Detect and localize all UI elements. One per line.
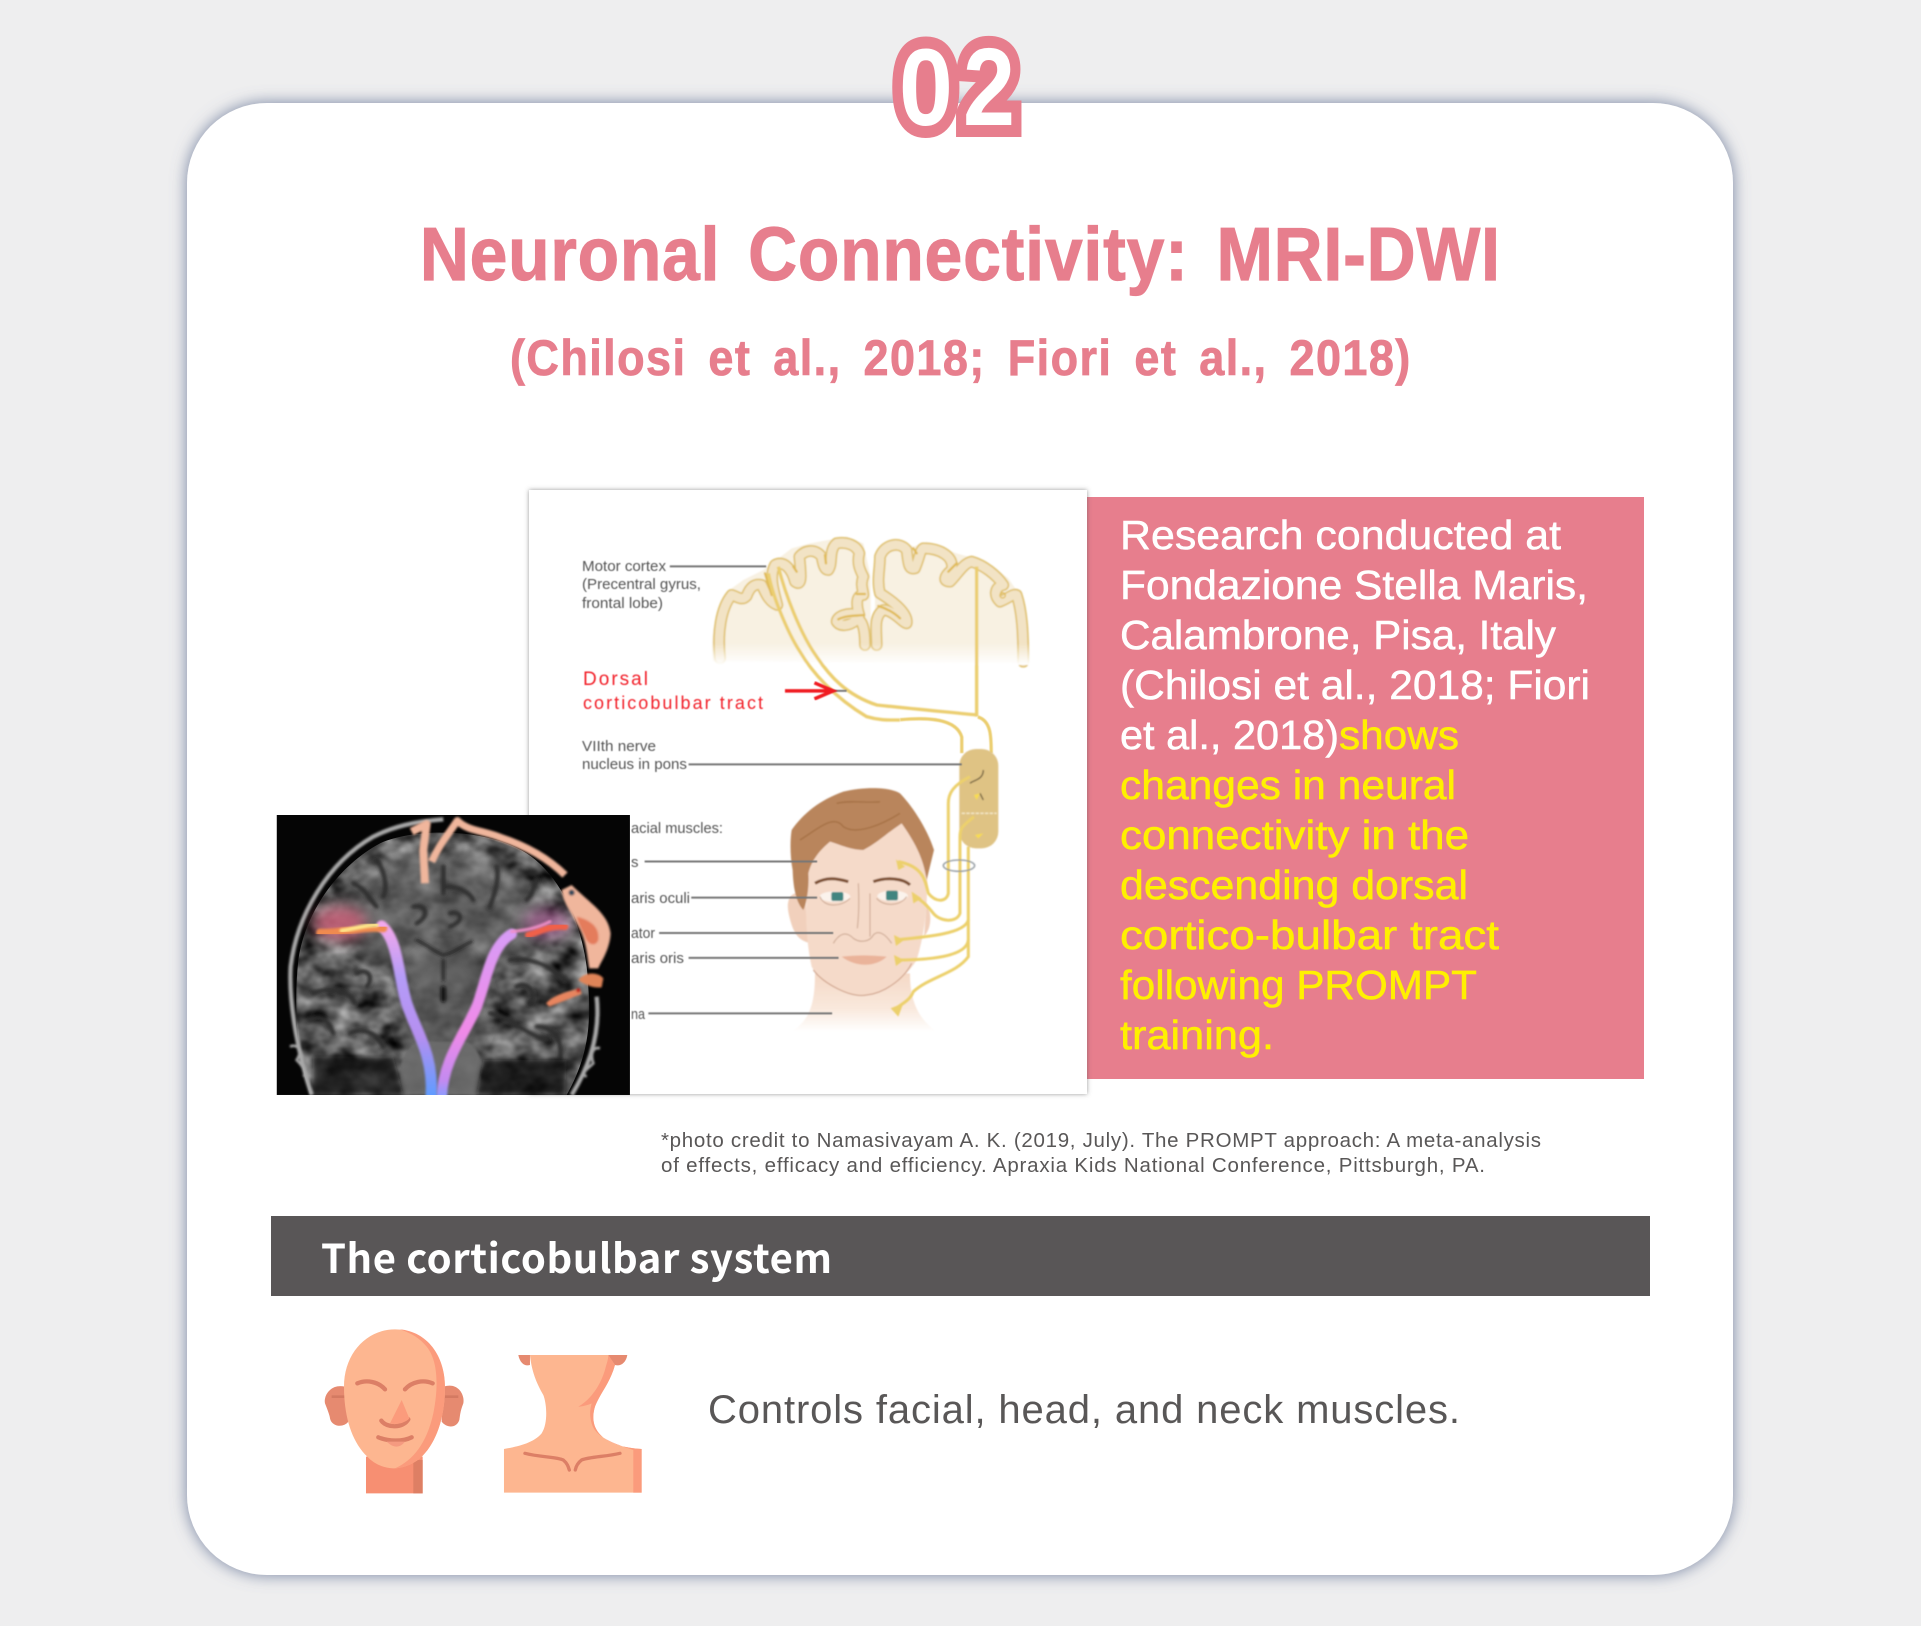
facial muscle labels: s (631, 854, 638, 871)
diagram labels: nucleus in pons (582, 756, 687, 773)
scalp vessels (412, 821, 611, 1007)
skull outline (290, 819, 600, 1095)
icon: head (325, 1329, 464, 1493)
research text: training. (1120, 1012, 1274, 1058)
facial muscle labels: aris oris (631, 950, 684, 967)
icon: neck (504, 1355, 642, 1493)
research text: changes in neural (1120, 762, 1456, 808)
left and right tract traces (320, 922, 565, 1097)
section number 02 (899, 25, 1015, 149)
brain tissue (296, 833, 589, 1095)
research text: descending dorsal (1120, 862, 1468, 908)
pons and lower tracts (891, 749, 998, 1017)
research text: (Chilosi et al., 2018; Fiori (1120, 662, 1590, 708)
connecting tracts to pons (900, 717, 991, 753)
section number 02: 2 (963, 26, 1015, 149)
upper tracts (768, 567, 977, 720)
research text: connectivity in the (1120, 812, 1469, 858)
research text: Fondazione Stella Maris, (1120, 562, 1588, 608)
research text: et al., 2018) (1120, 712, 1339, 758)
photo credit caption: *photo credit to Namasivayam A. K. (2019, July). The PROMPT approach: A meta-analysis (661, 1129, 1541, 1152)
label leader lines (645, 566, 962, 1013)
photo credit caption: of effects, efficacy and efficiency. Apraxia Kids National Conference, Pittsburgh, PA. (661, 1154, 1485, 1177)
description text: Controls facial, head, and neck muscles. (708, 1388, 1460, 1432)
brain (707, 537, 1037, 720)
diagram labels: frontal lobe) (582, 595, 663, 612)
section number 02: 2 (963, 26, 1015, 149)
facial muscle labels: na (631, 1006, 646, 1023)
diagram labels: Motor cortex (582, 558, 667, 575)
research text: Calambrone, Pisa, Italy (1120, 612, 1557, 658)
photo credit caption (661, 1129, 1541, 1177)
diagram labels: Dorsal (583, 669, 648, 690)
diagram labels: VIIth nerve (582, 738, 656, 755)
panel: pink research text box (1087, 497, 1644, 1079)
research text: Research conducted at (1120, 512, 1562, 558)
research text: shows (1339, 712, 1459, 758)
section number 02: 0 (899, 25, 953, 148)
diagram labels: (Precentral gyrus, (582, 576, 701, 593)
facial muscle labels (631, 820, 723, 1023)
diagram labels (582, 558, 763, 773)
section number 02: 0 (899, 25, 953, 148)
panel: corticobulbar tract diagram (529, 490, 1087, 1094)
research text: cortico-bulbar tract (1120, 912, 1500, 958)
section heading: The corticobulbar system (321, 1227, 832, 1285)
title: Neuronal Connectivity: MRI-DWI (420, 213, 1501, 297)
man's face (788, 788, 937, 1032)
facial muscle labels: acial muscles: (631, 820, 723, 837)
panel: main card (187, 103, 1733, 1575)
research text: following PROMPT (1120, 962, 1477, 1008)
MRI brain scan image (277, 815, 630, 1097)
facial muscle labels: ator (631, 925, 655, 942)
research text (1120, 512, 1590, 1058)
red arrow (785, 683, 833, 699)
subtitle: citations: (Chilosi et al., 2018; Fiori et al., 2018) (510, 331, 1412, 387)
facial muscle labels: aris oculi (631, 890, 690, 907)
diagram labels: corticobulbar tract (583, 693, 763, 713)
section bar: The corticobulbar system (271, 1216, 1650, 1296)
activation haze (313, 907, 570, 940)
